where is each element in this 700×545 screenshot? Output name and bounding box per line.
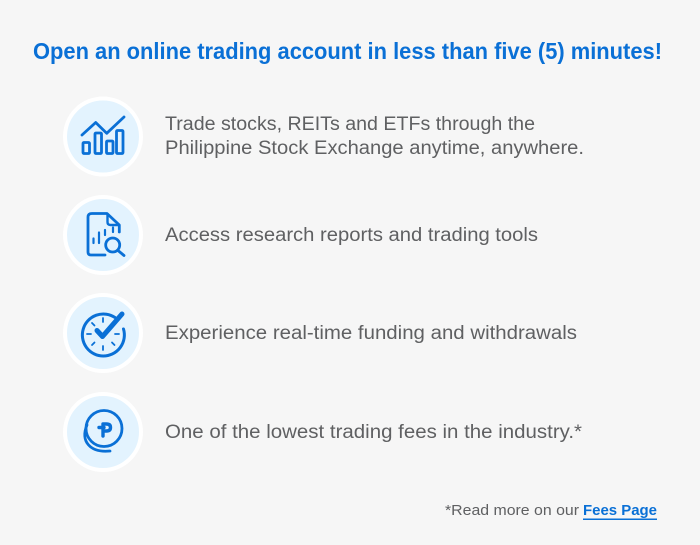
text: trade stocks: Trade stocks, REITs and ETFs through the <box>165 114 535 135</box>
text: real-time funding: Experience real-time funding and withdrawals <box>165 323 577 344</box>
icon: clock with check mark <box>65 295 141 371</box>
footnote with fees page link <box>445 502 657 520</box>
footnote with fees page link: *Read more on our <box>445 502 579 519</box>
text: research reports: Access research reports and trading tools <box>165 225 538 246</box>
icon: report with magnifier <box>65 197 141 273</box>
text: trade stocks: Philippine Stock Exchange anytime, anywhere. <box>165 138 584 159</box>
icon: line and bar chart <box>65 98 141 174</box>
footnote with fees page link: Fees Page <box>583 502 657 519</box>
icon: peso coins <box>65 394 141 470</box>
title: Open an online trading account in less than five (5) minutes! <box>33 38 662 64</box>
text: trade stocks <box>165 114 584 159</box>
text: lowest fees: One of the lowest trading fees in the industry.* <box>165 422 583 443</box>
